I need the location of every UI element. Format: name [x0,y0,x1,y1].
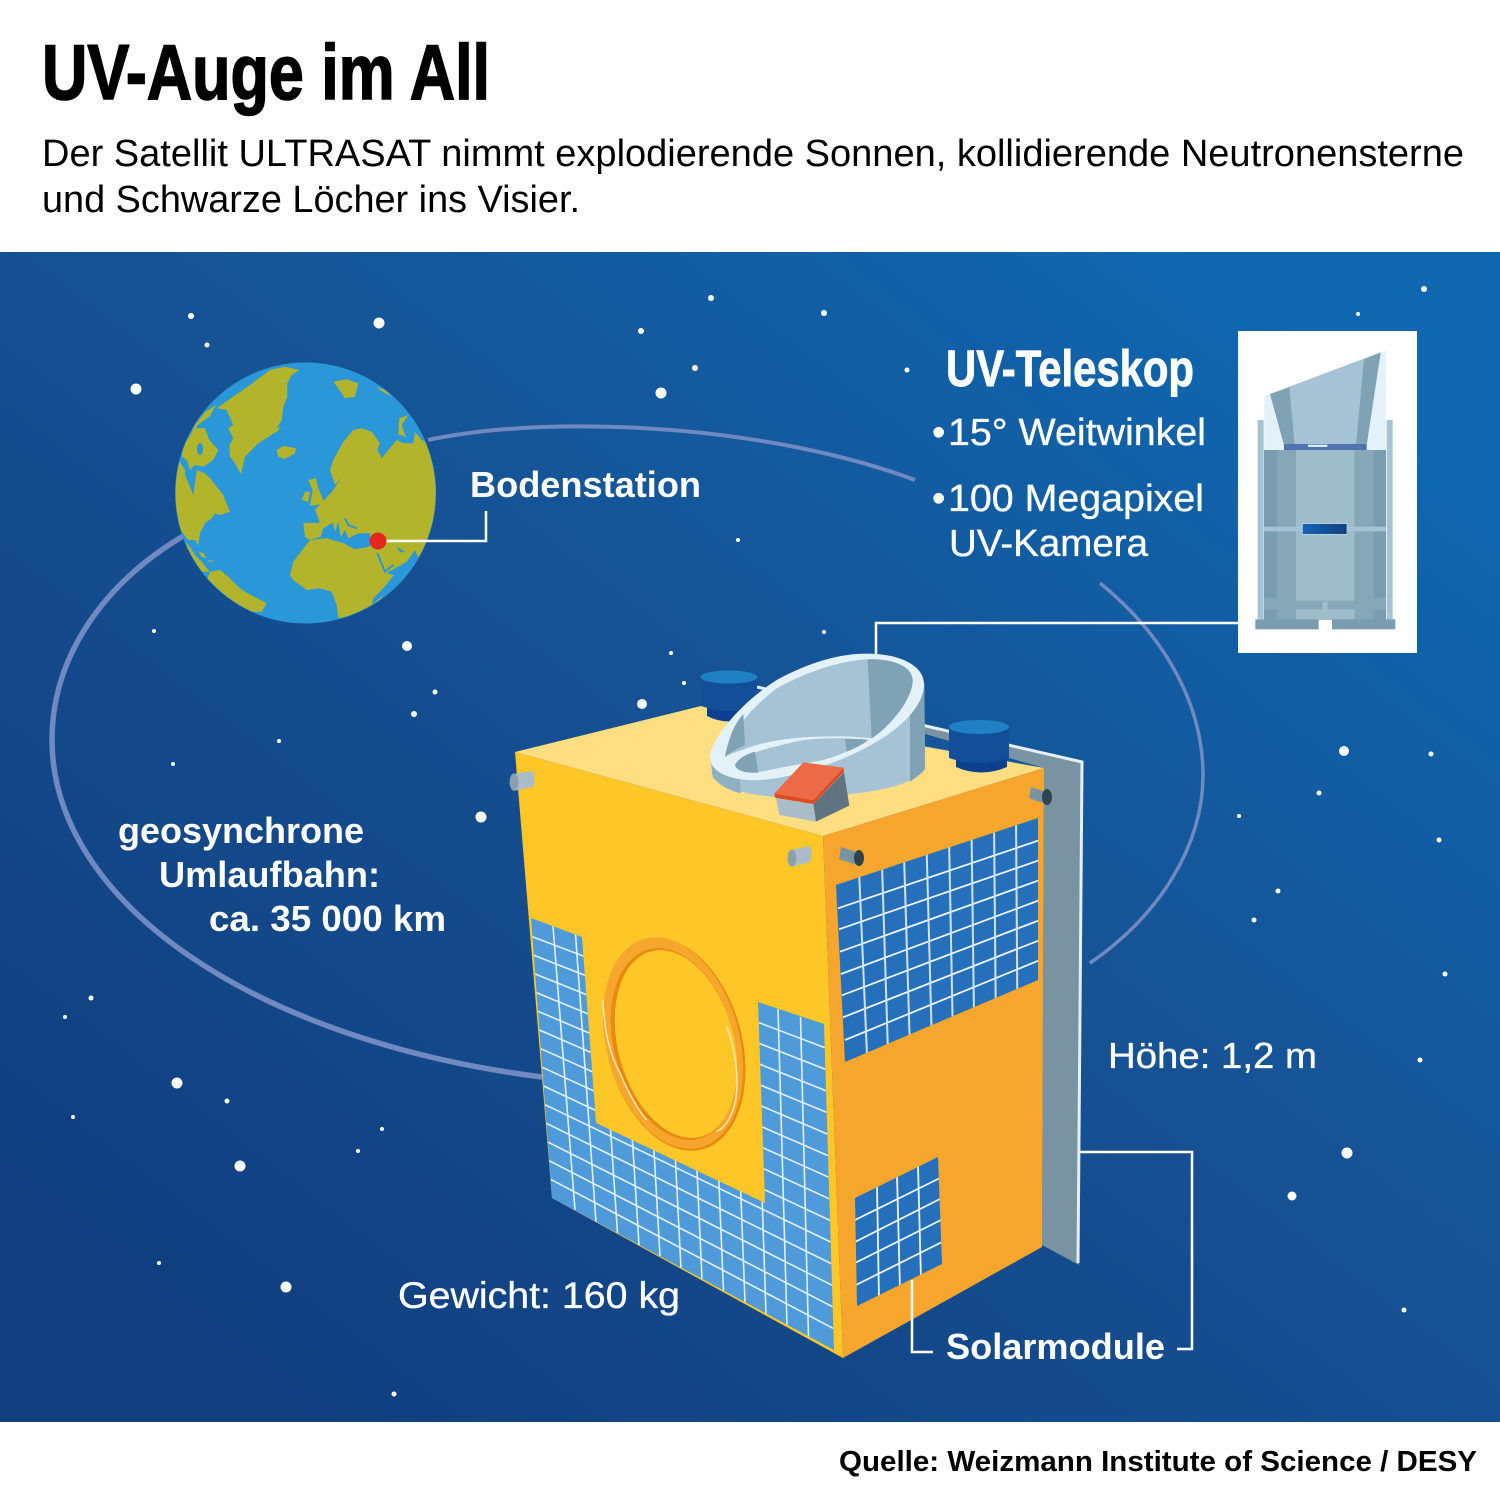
solar panel, small [855,1157,942,1306]
solar panel, right face [836,815,1040,1062]
Madagascar [372,595,384,605]
thruster left [700,670,758,722]
text block: telescope specs: UV-Kamera [949,523,1149,565]
red box sensor [774,762,849,822]
Hispaniola [208,560,214,562]
United Kingdom [308,478,323,506]
source line: Quelle: Weizmann Institute of Science / DESY [839,1446,1477,1478]
Eurasia and Africa [290,428,445,618]
stars [63,286,1448,1396]
Greenland [217,367,299,474]
text block: orbit label: ca. 35 000 km [209,898,446,939]
text block: orbit label: geosynchrone [118,810,364,851]
top face [515,706,1044,836]
callout: Solarmodule: Solarmodule [946,1326,1165,1367]
text block: telescope specs: • [932,412,945,454]
ground station marker [370,532,386,550]
subtitle: und Schwarze Löcher ins Visier. [42,179,580,221]
solar panels, left face [531,918,834,1350]
right face [823,768,1044,1358]
title: UV-Auge im All [42,28,490,116]
callout: Bodenstation: Bodenstation [470,464,701,505]
Cuba [198,552,207,558]
left face [515,752,843,1358]
callout: Solarmodule [912,1152,1192,1367]
panel: space background [0,252,1500,1422]
callout line: telescope [876,623,1240,655]
text block: telescope specs [932,412,1206,565]
callout: Bodenstation [370,464,701,550]
text block: telescope specs: 15° Weitwinkel [948,412,1206,454]
text block: telescope specs: 100 Megapixel [948,478,1204,520]
Novaya Zemlya [398,415,408,437]
label: Höhe: Höhe: 1,2 m [1108,1035,1317,1076]
telescope tube [710,654,925,822]
North America [176,462,230,545]
rear grey panel [757,686,1083,1265]
satellite [510,654,1083,1358]
subtitle [42,133,1464,221]
text block: telescope specs: • [932,478,945,520]
seas [197,443,405,553]
text block: orbit label: Umlaufbahn: [159,854,380,895]
Central America [186,543,210,572]
pegs [510,771,1052,867]
panel: telescope cross-section [1238,331,1417,653]
label: Gewicht: Gewicht: 160 kg [398,1275,680,1316]
South America [205,570,267,612]
Baffin region [182,428,218,470]
ring aperture [581,921,768,1167]
subtitle: Der Satellit ULTRASAT nimmt explodierende Sonnen, kollidierende Neutronensterne [42,133,1464,175]
Iceland [277,446,296,459]
orbit path [52,426,1203,1077]
Ireland [302,492,310,502]
icon: earth globe [170,362,445,624]
heading: UV-Teleskop: UV-Teleskop [946,340,1194,397]
Franz Josef Land [376,387,393,396]
Svalbard [333,379,358,398]
thruster right [949,720,1009,772]
Arctic islands [190,405,216,436]
text block: orbit label [118,810,446,939]
